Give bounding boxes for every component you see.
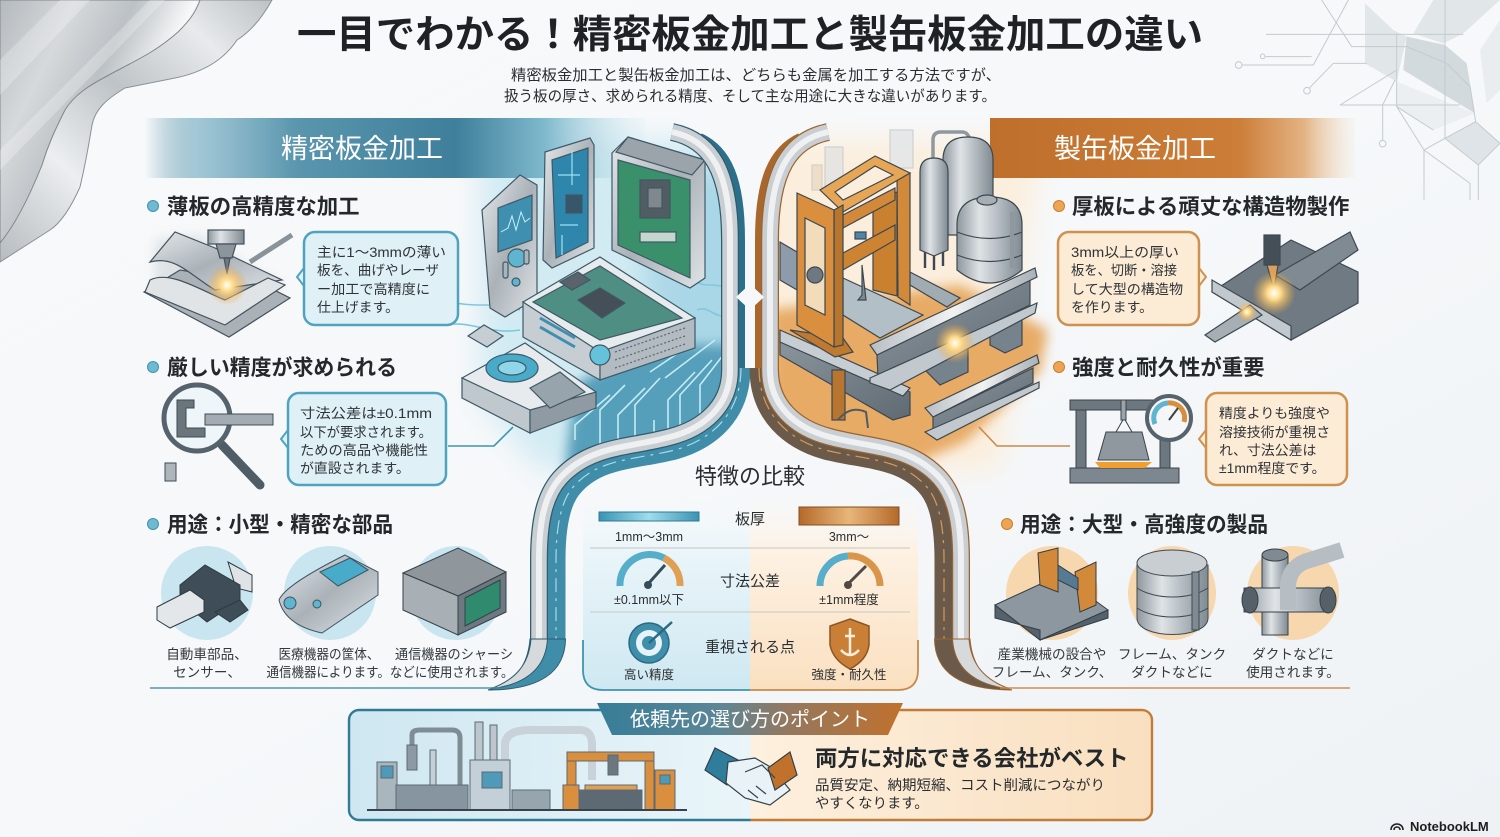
heading: small parts: 用途：小型・精密な部品 <box>167 513 393 537</box>
row: priority <box>624 619 887 682</box>
circuit traces <box>445 280 728 445</box>
main open box <box>523 257 695 378</box>
icon: tank <box>1128 546 1216 640</box>
decoration: metal sheet top-left <box>0 0 272 262</box>
row: tolerance: ±0.1mm以下 <box>614 593 684 607</box>
captions: small parts: 通信機器のシャーシ <box>395 647 513 662</box>
callout: thick sheet <box>1058 232 1206 325</box>
decoration: geometric lines top-right <box>1235 0 1500 200</box>
callout: thin sheet: 仕上げます。 <box>317 299 399 315</box>
row: thickness: 1mm〜3mm <box>615 530 683 544</box>
row: tolerance: 寸法公差 <box>720 573 780 590</box>
callout text: 両方に対応できる会社がベスト <box>815 745 1128 771</box>
icon: medical enclosure <box>279 546 378 640</box>
callout: thick sheet: を作ります。 <box>1071 299 1153 315</box>
captions: large products <box>992 647 1340 680</box>
right ribbon <box>751 132 1012 690</box>
row: priority: 高い精度 <box>624 667 674 682</box>
banner <box>597 703 903 735</box>
banner: 依頼先の選び方のポイント <box>630 708 870 731</box>
orange frame <box>790 156 910 357</box>
header: precision sheet metal <box>145 118 645 178</box>
captions: large products: 産業機械の設合や <box>998 647 1106 662</box>
illustration: factory <box>367 722 687 810</box>
icon: pipes <box>1242 546 1342 640</box>
illustration: load test <box>1070 396 1191 483</box>
handheld device <box>482 175 537 317</box>
title: 一目でわかる！精密板金加工と製缶板金加工の違い <box>297 14 1203 57</box>
callout: thick sheet: して大型の構造物 <box>1071 281 1183 297</box>
illustration: steel fabrication scene <box>780 130 1039 440</box>
callout: strict tolerance: 以下が要求されます。 <box>300 424 432 440</box>
callout: thick sheet: 3mm以上の厚い <box>1071 244 1179 260</box>
captions: large products: 使用されます。 <box>1246 664 1340 680</box>
chip <box>468 325 503 347</box>
header: can sheet metal <box>990 118 1355 178</box>
callout: thin sheet <box>297 232 458 325</box>
callout: strict tolerance <box>281 393 446 485</box>
captions: small parts <box>166 646 514 680</box>
panel: right zone background <box>740 140 1048 470</box>
panel: how to choose <box>349 703 1152 820</box>
callout: strict tolerance: ための高品や機能性 <box>300 442 428 458</box>
illustration: magnifier and micrometer <box>164 385 273 485</box>
small post <box>832 370 845 420</box>
circuit board device <box>543 138 594 268</box>
callout: thick sheet: 板を、切断・溶接 <box>1071 262 1177 278</box>
callout: thin sheet: ー加工で高精度に <box>317 281 430 297</box>
rails and table <box>780 242 960 420</box>
comparison heading: 特徴の比較 <box>695 464 805 489</box>
illustration: laser cutting <box>144 230 292 337</box>
row: tolerance: ±1mm程度 <box>819 592 879 607</box>
panel bottom rules <box>150 687 1350 689</box>
captions: small parts: 自動車部品、 <box>166 647 248 662</box>
connector line right <box>979 427 1070 446</box>
lower I-beam <box>925 355 1039 440</box>
captions: large products: ダクトなどに <box>1252 647 1334 662</box>
main I-beam <box>870 268 1037 390</box>
subtitle <box>504 67 1001 105</box>
icon: handshake <box>705 748 797 805</box>
row: tolerance <box>614 555 880 607</box>
icon: telecom chassis <box>403 546 506 640</box>
connector line left <box>448 427 513 446</box>
subtitle: 精密板金加工と製缶板金加工は、どちらも金属を加工する方法ですが、 <box>511 67 1001 84</box>
captions: large products: フレーム、タンク <box>1118 647 1226 662</box>
captions: large products: ダクトなどに <box>1131 665 1213 680</box>
support blocks <box>925 320 1022 385</box>
faint columns <box>812 130 913 190</box>
subtitle: 扱う板の厚さ、求められる精度、そして主な用途に大きな違いがあります。 <box>504 88 996 105</box>
left ribbon <box>488 132 749 690</box>
callout text <box>815 745 1128 812</box>
callout: strength: 精度よりも強度や <box>1219 405 1330 421</box>
panel: comparison table <box>583 495 918 690</box>
heading: thick sheet: 厚板による頑丈な構造物製作 <box>1072 195 1349 219</box>
captions: small parts: 通信機器によります。などに使用されます。 <box>266 664 514 680</box>
callout text: 品質安定、納期短縮、コスト削減につながり <box>815 776 1105 794</box>
callout: strict tolerance: 寸法公差は±0.1mm <box>300 405 432 421</box>
panel: left zone background <box>480 140 760 470</box>
open chassis <box>612 137 705 288</box>
row: priority: 強度・耐久性 <box>811 667 887 682</box>
callout text: やすくなります。 <box>815 795 929 812</box>
lower device <box>462 343 596 430</box>
header: precision sheet metal: 精密板金加工 <box>281 134 443 164</box>
callout: strength: れ、寸法公差は <box>1219 442 1316 458</box>
weld spark <box>935 323 975 363</box>
captions: small parts: 医療機器の筐体、 <box>278 646 380 662</box>
heading: thin sheet: 薄板の高精度な加工 <box>167 195 360 219</box>
callout: thin sheet: 主に1〜3mmの薄い <box>317 244 446 260</box>
heading: strict tolerance: 厳しい精度が求められる <box>167 355 397 380</box>
callout: strength <box>1199 393 1347 485</box>
icon: automotive sensor <box>157 546 253 640</box>
icon: industrial machine <box>995 546 1108 640</box>
heading: strength: 強度と耐久性が重要 <box>1072 355 1265 380</box>
callout: strength: ±1mm程度です。 <box>1219 460 1326 476</box>
illustration: welding <box>1205 232 1358 342</box>
row: thickness: 板厚 <box>735 511 765 528</box>
captions: large products: フレーム、タンク、 <box>992 665 1112 680</box>
callout: strict tolerance: が直設されます。 <box>300 460 410 476</box>
tanks <box>920 132 1022 283</box>
brand: NotebookLM: NotebookLM <box>1410 819 1489 834</box>
row: thickness <box>599 507 899 544</box>
header: can sheet metal: 製缶板金加工 <box>1054 134 1216 164</box>
callout: strength: 溶接技術が重視さ <box>1219 424 1330 440</box>
row: priority: 重視される点 <box>705 639 795 656</box>
row: thickness: 3mm〜 <box>829 530 869 544</box>
captions: small parts: センサー、 <box>173 665 241 680</box>
illustration: electronics devices <box>445 137 728 445</box>
heading: large products: 用途：大型・高強度の製品 <box>1020 513 1268 537</box>
callout: thin sheet: 板を、曲げやレーザ <box>317 262 439 278</box>
